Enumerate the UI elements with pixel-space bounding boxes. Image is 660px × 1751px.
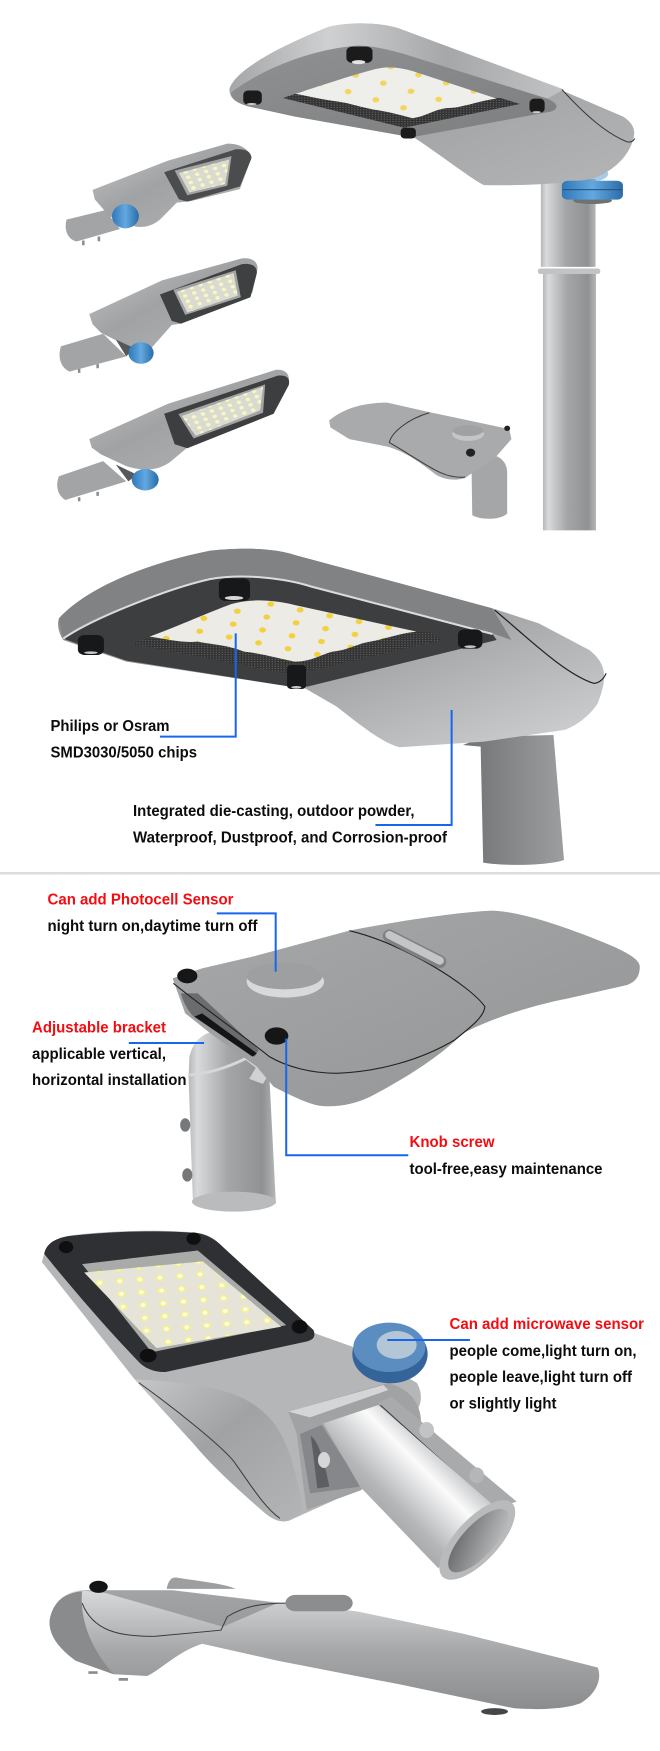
- text: chips: [50, 718, 197, 762]
- divider: [0, 872, 660, 874]
- small lamp 3: [57, 370, 289, 501]
- leader: knob: [286, 1038, 408, 1155]
- side seam: [495, 610, 606, 683]
- text: chips: SMD3030/5050 chips: [50, 744, 197, 762]
- panel: LED chips and die-cast housing: [58, 549, 606, 865]
- knob screws: [177, 969, 288, 1045]
- small lamp 2: [60, 258, 258, 373]
- glass: [82, 1251, 286, 1352]
- gasket knobs: [243, 47, 545, 138]
- text: bracket: Adjustable bracket: [32, 1020, 166, 1036]
- bracket assembly and sensor: [288, 1323, 527, 1592]
- microwave sensor: [352, 1323, 428, 1383]
- small lamp top view: [329, 403, 511, 519]
- leader: housing: [375, 710, 452, 825]
- text: microwave sensor: people come,light turn on,: [450, 1343, 636, 1360]
- text: photocell: Can add Photocell Sensor: [48, 892, 234, 908]
- LED array: [84, 1261, 281, 1348]
- dark gasket: [44, 1231, 314, 1372]
- text: chips: Philips or Osram: [50, 718, 170, 735]
- text: photocell: [48, 892, 258, 935]
- hinge: [389, 935, 440, 962]
- lamp body: [42, 1231, 421, 1521]
- underside plate: [231, 46, 557, 137]
- LED panel: [295, 67, 497, 118]
- mount plate: [288, 1383, 421, 1510]
- panel: underside with microwave sensor: [42, 1231, 599, 1715]
- gasket screws: [59, 1233, 308, 1362]
- adjustment slot: [311, 1436, 329, 1488]
- cover seam: [173, 931, 485, 1073]
- leader: bracket: [129, 1042, 204, 1044]
- blue sensor: [562, 181, 623, 204]
- top rim: [229, 23, 564, 99]
- leader: photocell: [217, 913, 276, 972]
- blue sensor glow: [558, 165, 608, 183]
- LED panel: [149, 600, 417, 662]
- text: bracket: [32, 1020, 186, 1089]
- text: knob screw: Knob screw: [410, 1134, 495, 1151]
- side-view lamp: [50, 1577, 599, 1715]
- text: microwave sensor: or slightly light: [450, 1396, 556, 1412]
- panel: top view features: [129, 911, 640, 1212]
- bore: [439, 1500, 518, 1581]
- small lamp 1: [66, 144, 252, 245]
- bracket: [180, 1030, 276, 1212]
- leader: chips: [160, 633, 236, 737]
- lamp housing: [58, 549, 604, 747]
- housing: [173, 911, 640, 1106]
- main lamp on pole: [229, 23, 635, 530]
- rim highlight: [63, 577, 492, 639]
- text: knob screw: tool-free,easy maintenance: [410, 1161, 603, 1178]
- text: knob screw: [410, 1134, 603, 1178]
- tube: [323, 1405, 495, 1568]
- side seam: [562, 90, 635, 142]
- top rim: [59, 549, 511, 640]
- knobs: [78, 578, 482, 689]
- mesh reflector: [283, 91, 520, 128]
- text: housing: Integrated die-casting, outdoor powder,: [133, 803, 414, 820]
- pole: [538, 179, 600, 530]
- lamp body: [229, 23, 634, 185]
- lamp bracket tube: [463, 735, 564, 865]
- lamp upper part: [42, 1231, 421, 1521]
- text: photocell: night turn on,daytime turn off: [48, 918, 258, 935]
- photocell puck: [247, 963, 324, 998]
- flange: [427, 1488, 527, 1592]
- mesh reflector: [130, 632, 442, 675]
- text: housing: Waterproof, Dustproof, and Corrosion-proof: [133, 830, 448, 846]
- leader: microwave: [387, 1339, 470, 1341]
- rail: [378, 1397, 517, 1508]
- text: microwave sensor: people leave,light turn off: [450, 1369, 633, 1386]
- panel: product family hero: [57, 23, 635, 530]
- underside plate: [63, 577, 497, 687]
- dark slot: [181, 993, 259, 1057]
- text: microwave sensor: Can add microwave sensor: [450, 1316, 644, 1333]
- text: housing: [133, 803, 448, 846]
- side shading: [135, 1379, 303, 1521]
- text: microwave sensor: [450, 1316, 644, 1412]
- text: bracket: horizontal installation: [32, 1072, 186, 1089]
- text: bracket: applicable vertical,: [32, 1046, 166, 1063]
